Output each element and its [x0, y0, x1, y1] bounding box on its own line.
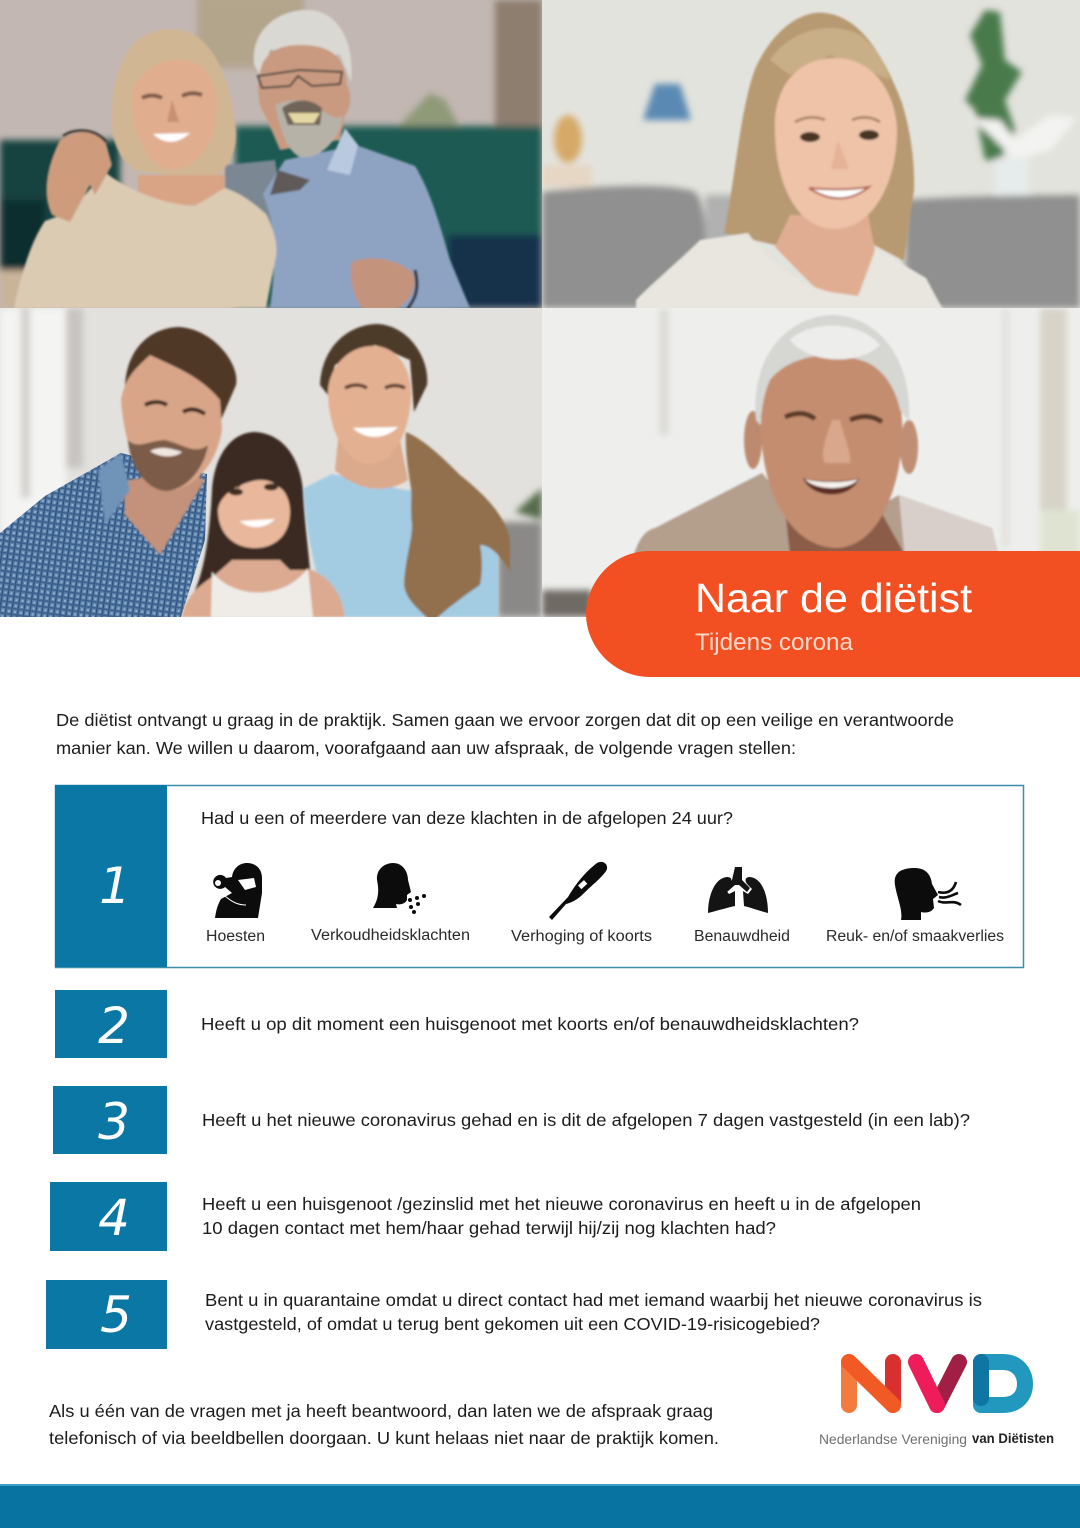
- photo: smiling older man: [542, 308, 1080, 617]
- question 4 text: [202, 1194, 921, 1238]
- number badge 1: 1: [99, 857, 131, 915]
- label: Verhoging of koorts: Verhoging of koorts: [511, 928, 652, 945]
- man's checked shirt: [0, 453, 207, 617]
- intro text: De diëtist ontvangt u graag in de praktijk. Samen gaan we ervoor zorgen dat dit op een veilige en verantwoorde: [56, 710, 954, 730]
- question 2 text: Heeft u op dit moment een huisgenoot met koorts en/of benauwdheidsklachten?: [201, 1014, 859, 1034]
- question 5 row: [46, 1280, 982, 1349]
- question 5 text: Bent u in quarantaine omdat u direct contact had met iemand waarbij het nieuwe coronavirus is: [205, 1290, 982, 1310]
- NVD logo: [819, 1362, 1054, 1447]
- photo: smiling blonde girl: [542, 0, 1080, 317]
- icon: lungs: [708, 867, 768, 913]
- photo: young family of three: [0, 308, 542, 623]
- number badge 2: 2: [98, 997, 130, 1055]
- question 2 row: [55, 990, 859, 1058]
- photo: older couple on a green sofa: [0, 0, 542, 315]
- number badge 1: [55, 785, 167, 967]
- logo mark: [849, 1362, 1025, 1405]
- closing note: Als u één van de vragen met ja heeft beantwoord, dan laten we de afspraak graag: [49, 1401, 713, 1421]
- question 1 text: Had u een of meerdere van deze klachten in de afgelopen 24 uur?: [201, 808, 733, 828]
- question 1 panel: [55, 785, 1024, 968]
- number badge 5: [46, 1280, 167, 1349]
- closing note: telefonisch of via beeldbellen doorgaan. U kunt helaas niet naar de praktijk komen.: [49, 1428, 719, 1448]
- question 3 row: [53, 1086, 970, 1154]
- question 4 text: 10 dagen contact met hem/haar gehad terwijl hij/zij nog klachten had?: [202, 1218, 776, 1238]
- intro text: manier kan. We willen u daarom, voorafgaand aan uw afspraak, de volgende vragen stellen:: [56, 738, 796, 758]
- label: Verkoudheidsklachten: Verkoudheidsklachten: [311, 927, 470, 944]
- number badge 4: 4: [98, 1189, 130, 1247]
- label: Hoesten: Hoesten: [206, 928, 265, 945]
- logo wordmark: [819, 1431, 1054, 1447]
- icon: head with scent waves: [895, 868, 961, 920]
- number badge 3: [53, 1086, 167, 1154]
- icon: thermometer: [549, 862, 607, 920]
- number badge 4: [50, 1182, 167, 1251]
- subtitle: Tijdens corona: Tijdens corona: [695, 629, 854, 656]
- intro text: [56, 710, 954, 758]
- question 4 text: Heeft u een huisgenoot /gezinslid met het nieuwe coronavirus en heeft u in de afgelopen: [202, 1194, 921, 1214]
- logo wordmark: van Diëtisten: [972, 1431, 1054, 1446]
- footer band: [0, 1484, 1080, 1528]
- question 5 text: vastgesteld, of omdat u terug bent gekomen uit een COVID-19-risicogebied?: [205, 1314, 820, 1334]
- title banner: [586, 551, 1080, 677]
- icon: head with sneeze droplets: [373, 863, 426, 914]
- question 5 text: [205, 1290, 982, 1334]
- number badge 5: 5: [100, 1286, 132, 1344]
- question 4 row: [50, 1182, 921, 1251]
- title: Naar de diëtist: Naar de diëtist: [695, 575, 973, 621]
- closing note: [49, 1401, 719, 1448]
- label: Benauwdheid: Benauwdheid: [694, 928, 790, 945]
- label: Reuk- en/of smaakverlies: Reuk- en/of smaakverlies: [826, 928, 1004, 945]
- logo wordmark: Nederlandse Vereniging: [819, 1432, 967, 1447]
- number badge 2: [55, 990, 167, 1058]
- number badge 3: 3: [98, 1093, 130, 1151]
- question 3 text: Heeft u het nieuwe coronavirus gehad en is dit de afgelopen 7 dagen vastgesteld (in een lab)?: [202, 1110, 970, 1130]
- icon: person coughing into elbow: [213, 863, 262, 918]
